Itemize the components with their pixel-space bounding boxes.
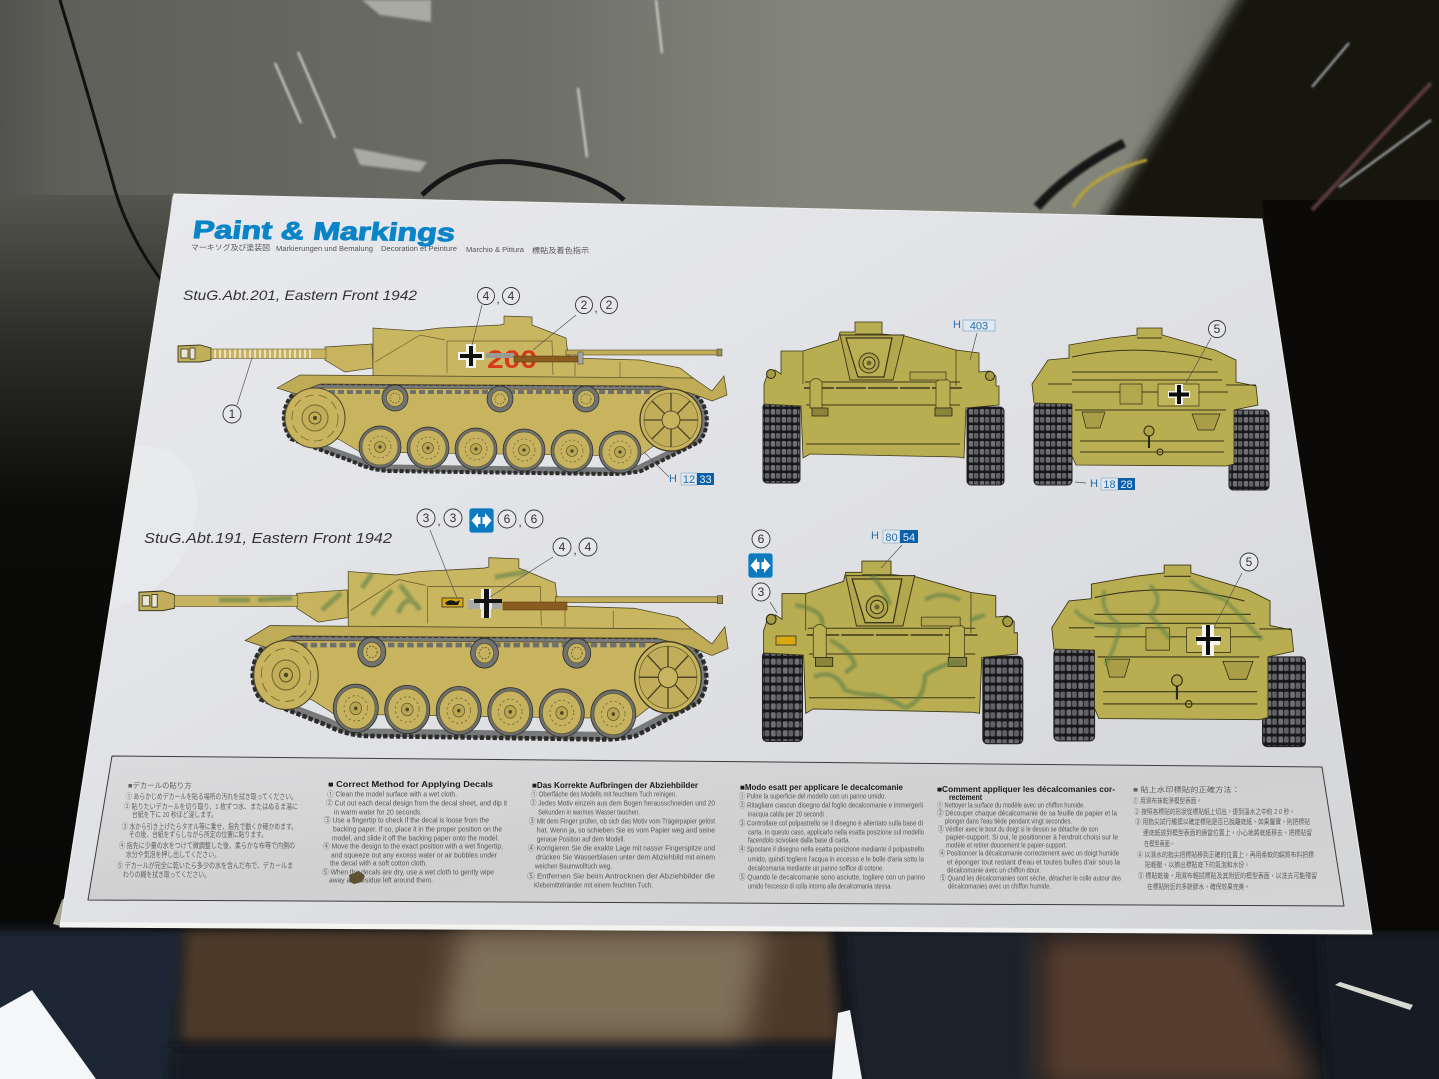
column: French instructions: ■Comment appliquer les décalcomanies cor- [937, 785, 1115, 794]
column: Japanese instructions: 水分や気泡を押し出してください。 [126, 850, 220, 859]
callouts: tank 2 side: , [437, 514, 441, 528]
column: English instructions: away any residue left around them. [329, 876, 433, 884]
column: Italian instructions: ⑤ Quando le decalcomanie sono asciutte, togliere con un panno [739, 872, 925, 882]
column: German instructions: genaue Position auf dem Modell. [537, 834, 625, 844]
column: German instructions: ② Jedes Motiv einzein aus dem Bogen herausschneiden und 20 [530, 798, 715, 808]
column: Japanese instructions: ⑤ デカールが完全に乾いたら多少の水を含んだ布で、デカールま [117, 861, 293, 870]
column: English instructions: the decal with a soft cotton cloth. [330, 858, 427, 868]
column: Italian instructions: facendolo scivolare dalla base di carta. [748, 836, 850, 844]
column: Japanese instructions: ② 貼りたいデカールを切り取り、1 枚ずつ水、またはぬるま湯に [124, 802, 298, 811]
box panel [60, 194, 1372, 934]
callouts: tank 2 side: , [573, 543, 577, 557]
column: English instructions: model, and slide it off the backing paper onto the model. [332, 834, 499, 842]
column: Italian instructions: ③ Controllare col polpastrello se il disegno è allentato sulla base di [739, 818, 923, 828]
column: French instructions: plonger dans l'eau tiède pendant vingt secondes. [945, 816, 1072, 826]
panel: decal instructions [88, 756, 1344, 906]
tank side view: StuG.Abt.201: 200 [487, 346, 537, 374]
column: Italian instructions: ④ Spostare il disegno nella esatta posizione mediante il polpastrello [739, 844, 924, 854]
column: English instructions: ⑤ When the decals are dry, use a wet cloth to gently wipe [322, 868, 494, 876]
column: French instructions [937, 785, 1121, 890]
column: Chinese instructions: ⑤ 標貼乾後，用濕布輕拭標貼及其附近的模型表面，以洗去可能殘留 [1138, 871, 1317, 880]
column: Italian instructions: ② Ritagliare ciascun disegno dal foglio decalcomanie e immergerli [739, 800, 923, 810]
callouts: tank 1 side: 4 [483, 289, 490, 303]
column: French instructions: ③ Vérifier avec le bout du doigt si le dessin se détache de son [938, 824, 1098, 834]
column: Chinese instructions: ② 按照各標貼的形狀從標貼紙上切出，復到溫水之中約 2 0 秒。 [1134, 807, 1295, 816]
column: Chinese instructions: 在標貼附近的多餘膠水，確保效果完美。 [1147, 882, 1250, 891]
column: Italian instructions: carta. In questo caso, applicarlo nella esatta posizione sul modello [748, 828, 924, 836]
subtitle in five languages: Decoration et Peinture [381, 244, 457, 253]
callouts: tank 2 front: H [871, 530, 879, 542]
tank rear view: StuG.Abt.201 [1032, 328, 1269, 490]
column: German instructions: ⑤ Entfernen Sie beim Antrocknen der Abziehbilder die [527, 872, 715, 880]
callouts: tank 2 side: 3 [423, 511, 430, 525]
column: Italian instructions: ■Modo esatt per applicare le decalcomanie [740, 783, 904, 792]
callouts: tank 1 side: 2 [606, 298, 613, 312]
callouts: tank 2 front: 54 [903, 532, 915, 544]
callouts: tank 2 front [748, 530, 918, 613]
column: French instructions: ⑤ Quand les décalcomanies sont sèche, détacher le colle autour des [940, 874, 1121, 882]
column: German instructions: weichen Baumwolltuch weg. [534, 862, 612, 870]
column: Japanese instructions: ③ 水から引き上げたらタオル等に乗せ、指先で動くか確かめます。 [122, 822, 297, 831]
column: Chinese instructions: 連底紙放到模型表面的適當位置上，小心地將底紙移去，把標貼留 [1143, 828, 1312, 837]
column: Japanese instructions: その後、台紙をずらしながら所定の位置に貼ります。 [129, 830, 267, 839]
callouts: tank 1 side: 33 [699, 474, 712, 486]
callouts: tank 1 side: 2 [581, 298, 588, 312]
column: Chinese instructions [1133, 785, 1317, 891]
callouts: tank 1 side: , [496, 292, 500, 306]
title: Paint & Markings [191, 216, 457, 247]
callouts: tank 2 side: 3 [450, 511, 457, 525]
subtitle in five languages: マーキソグ及び塗装図 [191, 242, 270, 252]
column: English instructions: ① Clean the model surface with a wet cloth. [327, 790, 457, 798]
column: English instructions: ■ Correct Method for Applying Decals [328, 780, 494, 789]
column: Japanese instructions: 台紙を下に 20 秒ほど浸します。 [132, 810, 217, 819]
callouts: tank 2 side: 4 [585, 540, 592, 554]
callouts: tank 1 rear: H [1090, 478, 1098, 490]
column: German instructions: ③ Mit dem Finger prüfen, ob sich das Motiv vom Trägerpapier gelöst [529, 816, 715, 826]
callouts: tank 2 side: , [518, 515, 522, 529]
callouts: tank 1 rear [1075, 320, 1226, 491]
column: Chinese instructions: 在模型表面。 [1144, 839, 1175, 848]
callouts: tank 2 front: 6 [758, 532, 765, 546]
sticker reflection on box side [110, 445, 197, 610]
column: French instructions: décalcomanie avec un chiffon doux. [947, 866, 1041, 874]
column: German instructions: ① Oberfläche des Modells mit feuchtem Tuch reinigen. [531, 790, 677, 798]
column: Italian instructions: decalcomania mediante un panno soffice di cotone. [748, 864, 884, 872]
tank rear view: StuG.Abt.191 [1052, 565, 1305, 747]
column: Japanese instructions: ④ 指先に少量の水をつけて微調整した後、柔らかな布等で内側の [119, 841, 295, 850]
callouts: tank 1 rear: 5 [1214, 322, 1221, 336]
column: Chinese instructions: ③ 用指尖試行觸摸以確定標貼是否已脫離底紙，如果屬實，則把標貼 [1135, 817, 1310, 826]
column: French instructions: ② Découper chaque décalcomanie de sa feuille de papier et la [937, 808, 1117, 818]
callout: tank 2 rear: 5 [1246, 555, 1253, 569]
column: English instructions: ② Cut out each decal design from the decal sheet, and dip it [326, 798, 507, 808]
paint code label 403: 403 [970, 320, 988, 332]
heading: StuG.Abt.201: StuG.Abt.201, Eastern Front 1942 [183, 287, 417, 303]
heading: StuG.Abt.191: StuG.Abt.191, Eastern Front 1942 [144, 530, 393, 547]
callouts: tank 1 rear: 18 [1103, 479, 1116, 491]
column: Chinese instructions: ① 用濕布抹乾淨模型表面。 [1133, 796, 1202, 805]
column: German instructions: Klebemittelränder mit einem feuchten Tuch. [534, 880, 653, 890]
callouts: tank 2 side [417, 508, 597, 598]
column: English instructions [322, 780, 507, 884]
column: Chinese instructions: ④ 以濕水的指尖把標貼移到正確的位置上，再用柔軟的綿質布料把標 [1137, 850, 1314, 859]
callouts: tank 2 side: 4 [559, 540, 566, 554]
column: French instructions: papier-support. Si oui, le positionner à l'endroit choisi sur le [946, 832, 1118, 842]
column: Italian instructions: umido l'eccesso di colla intorno alla decalcomania stessa. [748, 882, 892, 890]
column: Japanese instructions: ① あらかじめデカールを貼る場所の汚れを拭き取ってください。 [126, 792, 297, 801]
callouts: tank 1 side: , [594, 301, 598, 315]
tank side view: StuG.Abt.191 [139, 558, 728, 739]
subtitle in five languages: Markierungen und Bemalung [276, 244, 373, 253]
column: English instructions: ④ Move the design to the exact position with a wet fingertip, [323, 842, 503, 850]
column: Japanese instructions: ■デカールの貼り方 [128, 781, 192, 790]
column: French instructions: ④ Positionner la décalcomanie correctement avec un doigt humide [939, 848, 1119, 858]
column: German instructions: Sekunden in warmes Wasser tauchen. [538, 808, 640, 816]
column: German instructions: hat. Wenn ja, so schieben Sie es vom Papier weg and seine [537, 826, 715, 834]
column: Japanese instructions [117, 781, 298, 879]
column: English instructions: ③ Use a fingertip to check if the decal is loose from the [324, 816, 489, 824]
column: Italian instructions [739, 783, 925, 890]
box lower edge highlight [60, 922, 1372, 934]
column: French instructions: rectement [949, 793, 982, 802]
column: Chinese instructions: ■ 貼上水印標貼的正確方法： [1133, 785, 1240, 794]
column: German instructions [527, 781, 715, 890]
column: German instructions: ■Das Korrekte Aufbringen der Abziehbilder [532, 781, 698, 790]
callouts: tank 1 side: 1 [229, 407, 236, 421]
column: Chinese instructions: 貼輕壓，以擠出標貼底下的氣泡和水份。 [1145, 860, 1250, 869]
callouts: tank 2 side: 6 [531, 512, 538, 526]
column: English instructions: and squeeze out any excess water or air bubbles under [331, 850, 498, 860]
subtitle in five languages: 標貼及着色指示 [532, 245, 589, 255]
column: German instructions: drücken Sie Wasserblasen unter dem Abziehbild mit einem [536, 852, 715, 862]
subtitle in five languages [191, 242, 589, 255]
callouts: tank 1 side: 4 [508, 289, 515, 303]
column: Italian instructions: umido, quindi togliere l'acqua in eccesso e le bolle d'aria sotto la [748, 854, 924, 864]
plastic flaps at the box corners [53, 195, 178, 926]
column: Italian instructions: inacqua calda per 20 secondi . [748, 810, 827, 818]
callouts: tank 2 front: 80 [885, 532, 898, 544]
column: German instructions: ④ Korrigieren Sie die exakte Lage mit nasser Fingerspitze und [528, 844, 715, 852]
paint code label 403: H [953, 319, 961, 331]
column: French instructions: modèle et retirer doucement le papier-support. [946, 840, 1067, 850]
column: Italian instructions: ① Pulire la superficie del modello con un panno umido. [739, 792, 886, 800]
callouts: tank 1 side: H [669, 473, 677, 485]
callouts: tank 1 rear: 28 [1120, 479, 1133, 491]
tank side view: StuG.Abt.201 [178, 316, 727, 474]
column: French instructions: ① Nettoyer la surface du modèle avec un chiffon humide. [937, 800, 1085, 810]
callouts: tank 1 side: 12 [683, 474, 695, 486]
tank front view: StuG.Abt.191 [763, 561, 1023, 744]
callouts: tank 1 side [223, 288, 714, 486]
column: English instructions: in warm water for 20 seconds. [334, 808, 422, 816]
paint code label 403 [953, 319, 995, 360]
column: French instructions: décalcomanies avec un chiffon humide. [948, 882, 1051, 890]
column: English instructions: backing paper. If so, place it in the proper position on the [333, 824, 502, 834]
subtitle in five languages: Marchio & Pittura [466, 245, 525, 254]
tank front view: StuG.Abt.201 [763, 322, 1004, 485]
callouts: tank 2 side: 6 [504, 512, 511, 526]
paper damage mark [349, 871, 365, 884]
column: Japanese instructions: わりの糊を拭き取ってください。 [123, 870, 210, 879]
callout: tank 2 rear [1214, 553, 1258, 627]
callouts: tank 2 front: 3 [758, 585, 765, 599]
column: French instructions: et éponger tout restant d'eau et toutes bulles d'air sous la [947, 858, 1120, 866]
